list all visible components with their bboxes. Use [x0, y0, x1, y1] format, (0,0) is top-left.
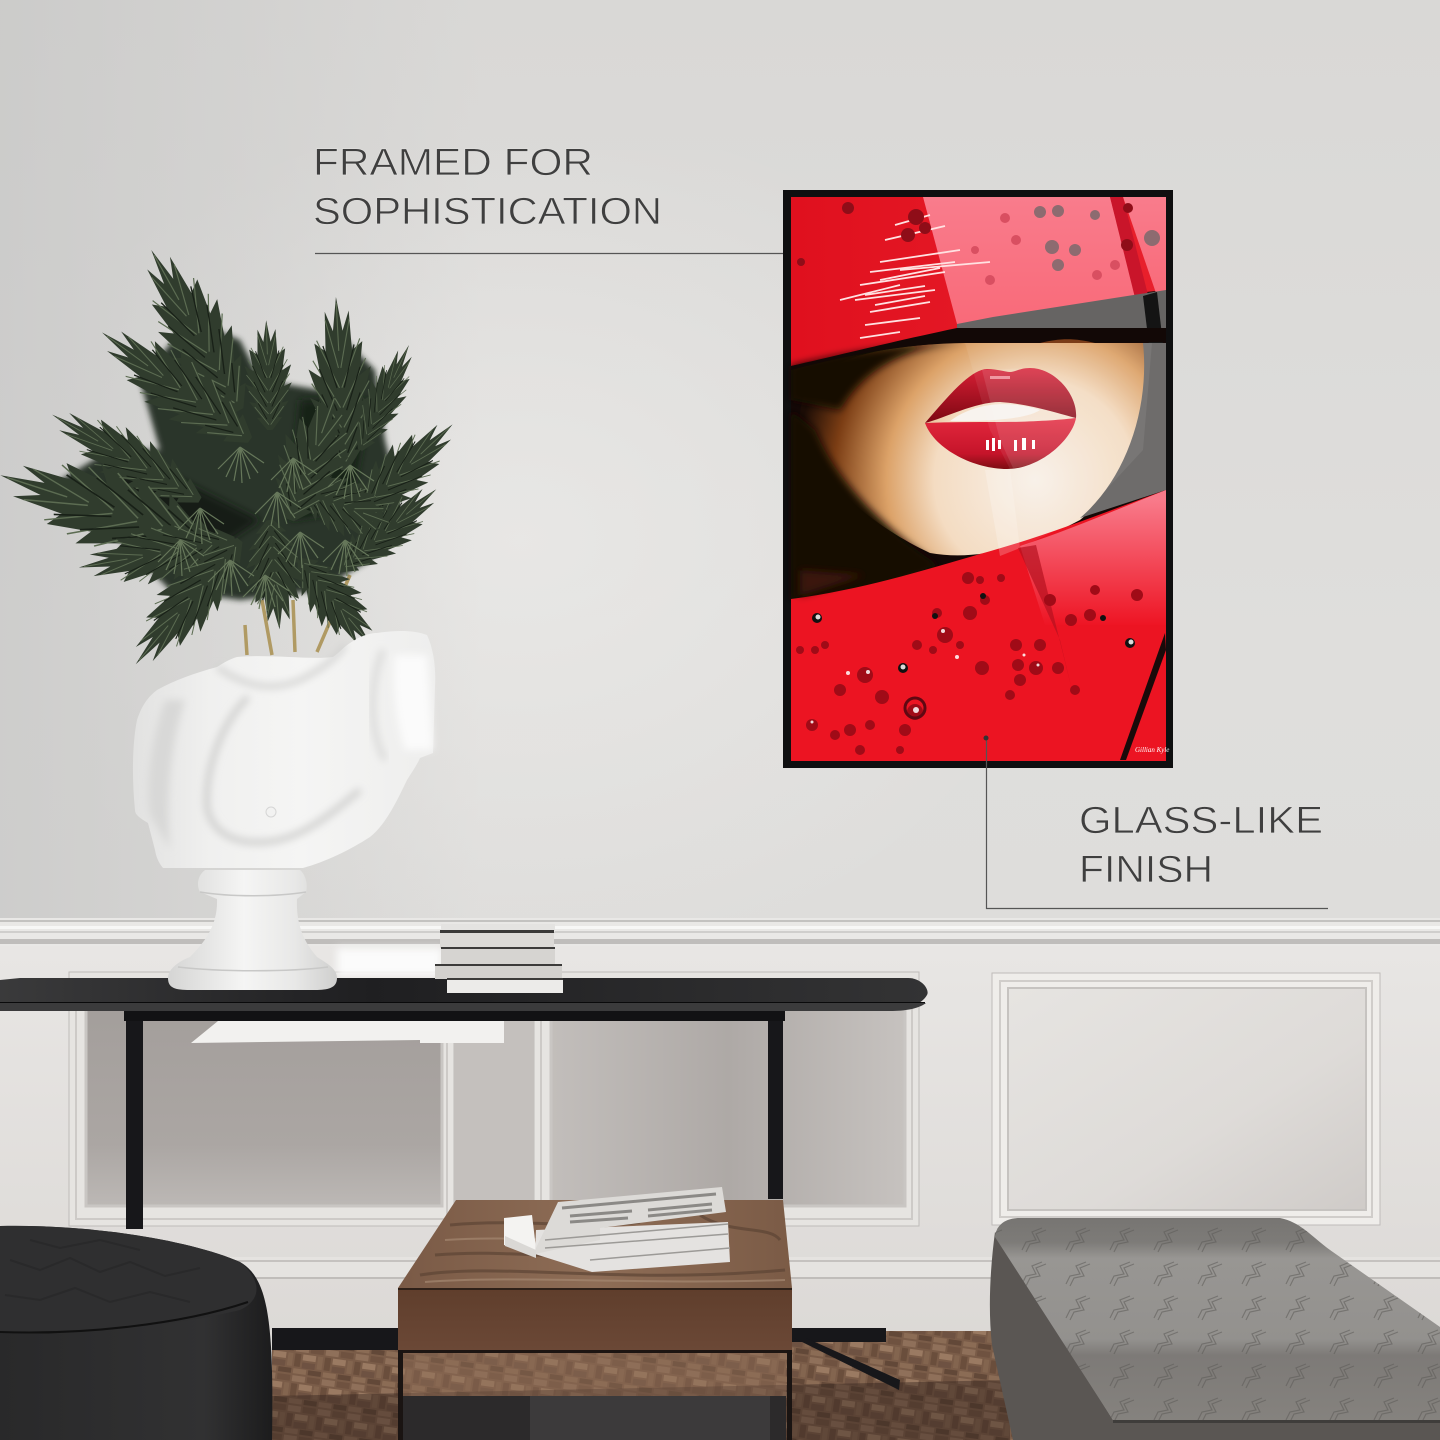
- console table base: [272, 1328, 900, 1390]
- dark round pouf: [0, 1226, 272, 1440]
- coffee table: [398, 1187, 792, 1440]
- open book: [504, 1187, 730, 1272]
- bust pedestal: [168, 870, 337, 990]
- bench top: [995, 1218, 1440, 1420]
- artist signature: Gillian Kyle: [1135, 746, 1169, 754]
- grey quilted bench: [990, 1218, 1440, 1440]
- callout leader line: glass finish: [984, 736, 1328, 908]
- callout text: glass-like finish: GLASS-LIKE: [1079, 800, 1323, 842]
- white torso bust vase: [133, 631, 435, 990]
- callout text: glass-like finish: FINISH: [1079, 849, 1213, 891]
- wainscot wall with moldings and panels: [0, 918, 1440, 1335]
- poster frame: [783, 190, 1173, 768]
- callout text: framed for sophistication: [313, 142, 662, 233]
- callout text: glass-like finish: [1079, 800, 1323, 891]
- top scratches: [840, 215, 990, 338]
- bench side: [990, 1232, 1440, 1440]
- framed poster: [783, 190, 1173, 768]
- plant: [0, 234, 470, 683]
- callout leader line: frame: [315, 250, 790, 256]
- bottom droplets: [796, 572, 1143, 755]
- console table: [0, 978, 928, 1229]
- poster artwork: [791, 197, 1169, 761]
- callout text: framed for sophistication: FRAMED FOR: [313, 142, 593, 184]
- book stack on console: [435, 924, 563, 993]
- floor: [272, 1331, 1040, 1440]
- callout text: framed for sophistication: SOPHISTICATION: [313, 191, 662, 233]
- lips: [925, 368, 1076, 469]
- top droplets: [797, 202, 1133, 266]
- glass reflection: [965, 343, 1152, 548]
